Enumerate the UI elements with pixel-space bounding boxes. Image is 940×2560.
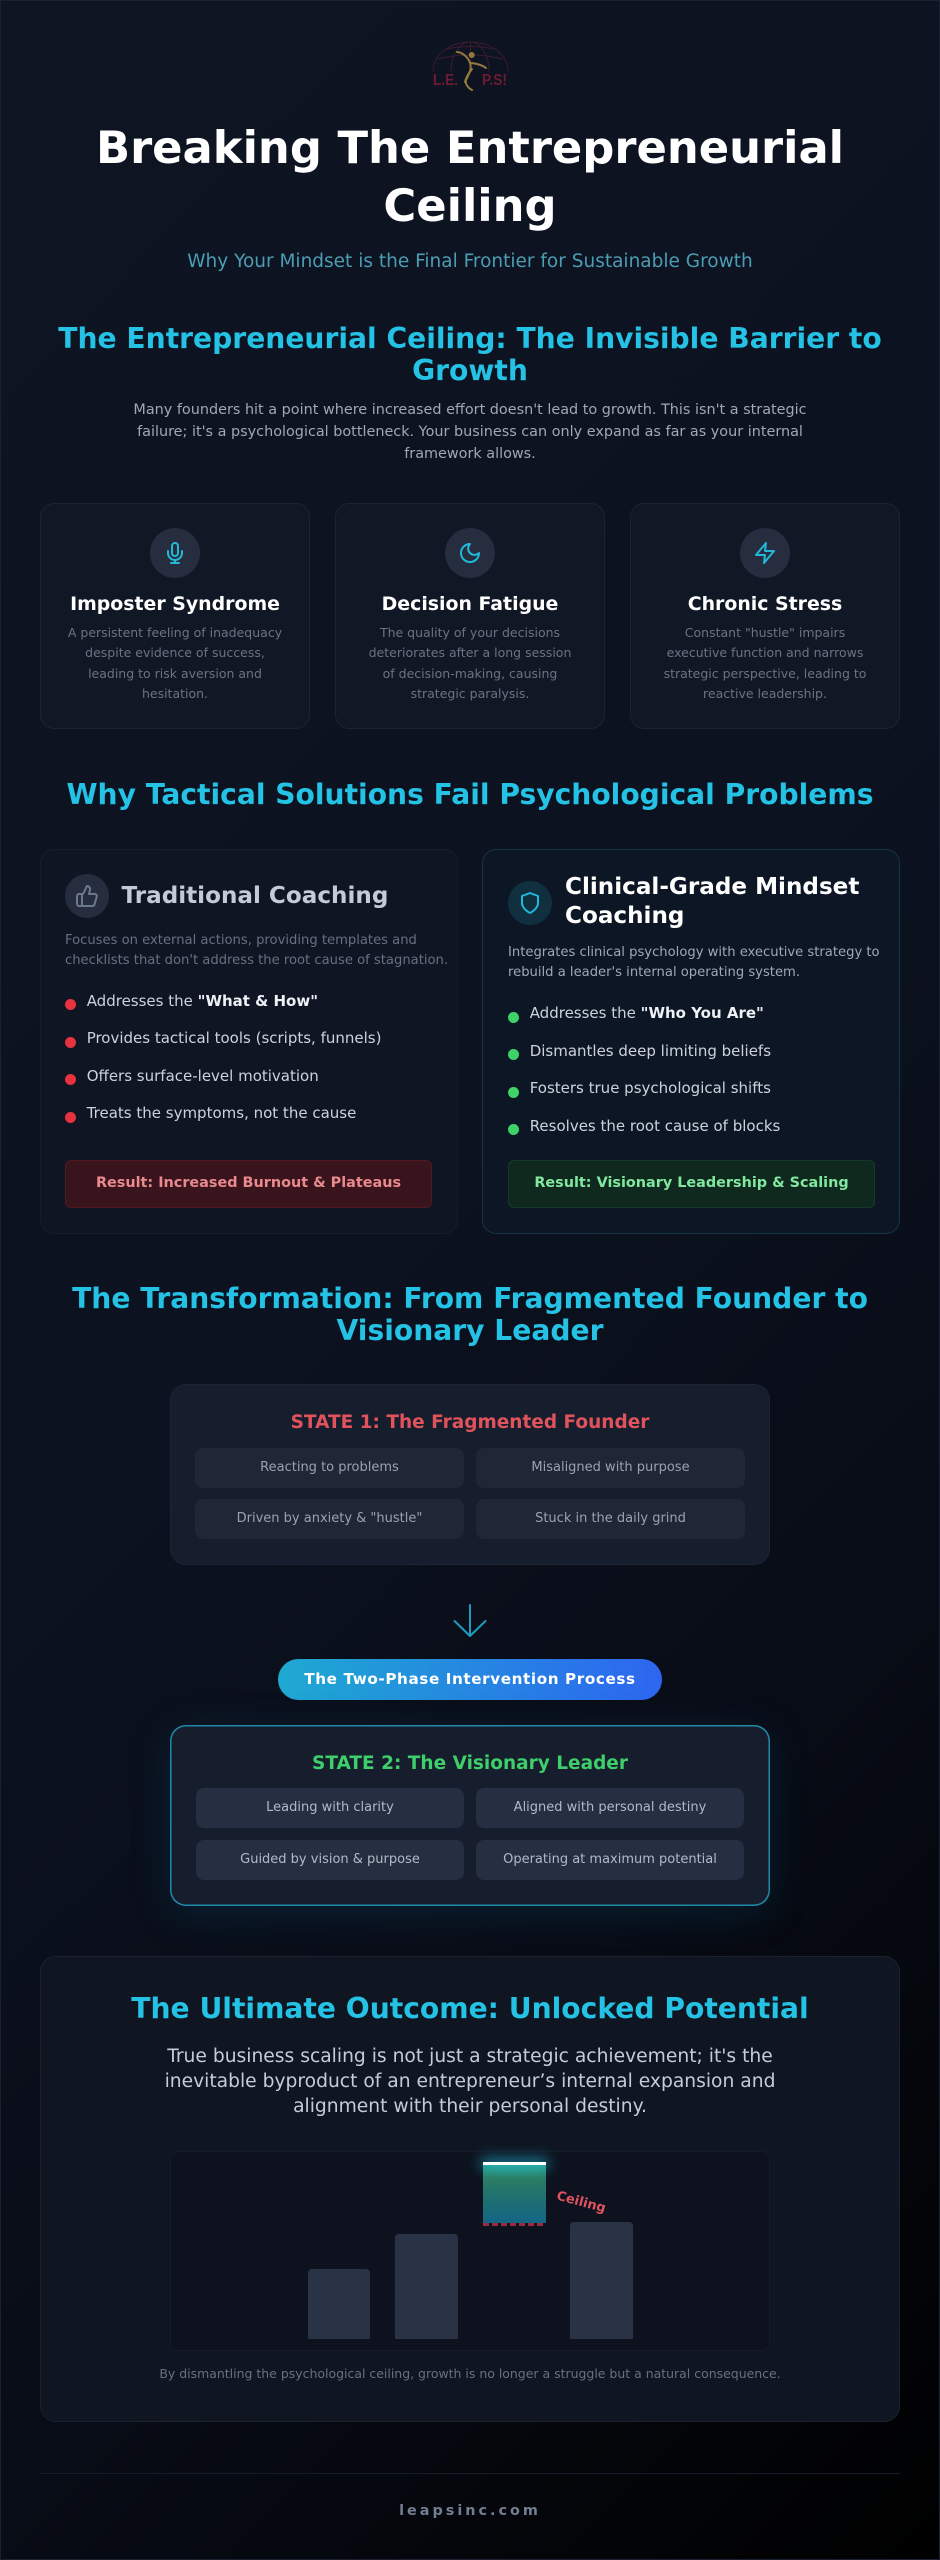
- intro paragraph: framework allows.: [404, 446, 536, 462]
- card text: [68, 625, 282, 701]
- panel text: [508, 945, 880, 980]
- trait: Aligned with personal destiny: [514, 1800, 706, 1815]
- card title: Chronic Stress: [688, 592, 842, 614]
- list item: Addresses the "Who You Are": [530, 1004, 764, 1022]
- section heading: transformation: [72, 1282, 868, 1347]
- card text: strategic paralysis.: [411, 686, 529, 701]
- panel: chronic stress: [630, 503, 900, 729]
- bar 2: [395, 2234, 458, 2339]
- bar 4: [570, 2222, 632, 2339]
- card text: hesitation.: [142, 686, 208, 701]
- panel: traditional coaching: [40, 849, 458, 1234]
- panel: state 2: [170, 1725, 770, 1906]
- panel heading: [565, 874, 859, 929]
- chart: growth bars: [170, 2151, 770, 2351]
- panel text: [65, 933, 448, 968]
- card text: strategic perspective, leading to: [664, 666, 866, 681]
- result: scaling: [508, 1160, 875, 1208]
- pill: two-phase process: The Two-Phase Intervention Process: [304, 1670, 636, 1688]
- trait: Misaligned with purpose: [531, 1460, 690, 1475]
- list item: Dismantles deep limiting beliefs: [530, 1042, 771, 1060]
- panel text: rebuild a leader's internal operating system.: [508, 965, 800, 980]
- icon: shield: [508, 881, 552, 925]
- bar 1: [308, 2268, 370, 2339]
- trait: [476, 1840, 744, 1880]
- panel: ultimate outcome: [40, 1956, 900, 2422]
- panel: imposter syndrome: [40, 503, 310, 729]
- card text: despite evidence of success,: [85, 645, 265, 660]
- trait: [195, 1499, 464, 1539]
- card text: The quality of your decisions: [380, 625, 560, 640]
- list item: Provides tactical tools (scripts, funnels): [87, 1029, 381, 1047]
- icon: thumbs up: [65, 874, 109, 918]
- trait: [196, 1788, 464, 1828]
- outcome text: inevitable byproduct of an entrepreneur’s internal expansion and: [165, 2071, 775, 2092]
- list item: Fosters true psychological shifts: [530, 1079, 771, 1097]
- trait: [196, 1840, 464, 1880]
- list item: Offers surface-level motivation: [87, 1067, 319, 1085]
- card text: of decision-making, causing: [383, 666, 557, 681]
- trait: [476, 1788, 744, 1828]
- arrow: down: [454, 1604, 486, 1637]
- card text: [664, 625, 866, 701]
- result: scaling: Result: Visionary Leadership & Scaling: [534, 1175, 849, 1191]
- card text: A persistent feeling of inadequacy: [68, 625, 282, 640]
- result: burnout: Result: Increased Burnout & Plateaus: [96, 1175, 401, 1191]
- trait: Stuck in the daily grind: [535, 1511, 686, 1526]
- pill: two-phase process: [278, 1658, 662, 1700]
- ceiling label: Ceiling: [555, 2189, 607, 2216]
- logo: [432, 42, 508, 91]
- footer: [40, 2473, 900, 2560]
- trait: [195, 1448, 464, 1488]
- section heading: transformation: Visionary Leader: [337, 1314, 603, 1347]
- trait: [476, 1448, 745, 1488]
- subtitle: Why Your Mindset is the Final Frontier for Sustainable Growth: [187, 251, 753, 272]
- state 1 heading: STATE 1: The Fragmented Founder: [291, 1412, 649, 1433]
- trait: Leading with clarity: [266, 1800, 394, 1815]
- section heading: transformation: The Transformation: From Fragmented Founder to: [72, 1282, 868, 1315]
- trait: Guided by vision & purpose: [240, 1852, 420, 1867]
- list item: Addresses the "What & How": [87, 992, 318, 1010]
- icon: lightning: [740, 528, 790, 578]
- outcome text: alignment with their personal destiny.: [293, 2096, 647, 2117]
- panel heading: Clinical-Grade Mindset: [565, 874, 859, 900]
- result: burnout: [65, 1160, 432, 1208]
- title: Ceiling: [383, 179, 557, 232]
- icon: moon: [445, 528, 495, 578]
- card title: Decision Fatigue: [382, 592, 558, 614]
- broken ceiling highlight: [482, 2162, 546, 2165]
- panel heading: Coaching: [565, 903, 684, 929]
- outcome text: True business scaling is not just a strategic achievement; it's the: [167, 2046, 773, 2067]
- card text: reactive leadership.: [703, 686, 827, 701]
- intro paragraph: Many founders hit a point where increased effort doesn't lead to growth. This isn't a strategic: [133, 402, 807, 418]
- bar 3: breakthrough: [473, 2149, 556, 2226]
- intro paragraph: [133, 402, 807, 462]
- state 2 heading: STATE 2: The Visionary Leader: [312, 1753, 628, 1774]
- section heading: ceiling: Growth: [412, 354, 528, 387]
- logo: L.E.: [433, 72, 458, 89]
- title: Breaking The Entrepreneurial: [96, 121, 844, 174]
- footer url: leapsinc.com: [399, 2503, 541, 2519]
- panel text: checklists that don't address the root cause of stagnation.: [65, 953, 448, 968]
- trait: Driven by anxiety & "hustle": [237, 1511, 422, 1526]
- section heading: ceiling: [58, 322, 882, 387]
- card title: Imposter Syndrome: [70, 592, 280, 614]
- outcome text: [165, 2046, 775, 2117]
- panel: clinical-grade coaching: [482, 849, 900, 1234]
- intro paragraph: failure; it's a psychological bottleneck. Your business can only expand as far as your internal: [137, 424, 803, 440]
- bar fill: [482, 2164, 546, 2222]
- trait: [476, 1499, 745, 1539]
- outcome heading: The Ultimate Outcome: Unlocked Potential: [131, 1992, 809, 2024]
- ceiling dashes: [482, 2222, 546, 2226]
- card text: [369, 625, 571, 701]
- card text: deteriorates after a long session: [369, 645, 571, 660]
- panel text: Focuses on external actions, providing templates and: [65, 933, 417, 948]
- card text: Constant "hustle" impairs: [685, 625, 845, 640]
- list item: Treats the symptoms, not the cause: [87, 1104, 356, 1122]
- card text: executive function and narrows: [667, 645, 863, 660]
- panel: decision fatigue: [335, 503, 605, 729]
- list item: Resolves the root cause of blocks: [530, 1117, 780, 1135]
- panel heading: Traditional Coaching: [122, 883, 388, 909]
- title: [96, 121, 844, 232]
- icon: microphone: [150, 528, 200, 578]
- panel: state 1: [170, 1384, 770, 1565]
- card text: leading to risk aversion and: [88, 666, 262, 681]
- trait: Operating at maximum potential: [503, 1852, 717, 1867]
- panel text: Integrates clinical psychology with executive strategy to: [508, 945, 880, 960]
- trait: Reacting to problems: [260, 1460, 399, 1475]
- section heading: tactical: Why Tactical Solutions Fail Psychological Problems: [66, 778, 874, 811]
- section heading: ceiling: The Entrepreneurial Ceiling: The Invisible Barrier to: [58, 322, 882, 355]
- chart caption: By dismantling the psychological ceiling, growth is no longer a struggle but a natural consequence.: [159, 2366, 781, 2381]
